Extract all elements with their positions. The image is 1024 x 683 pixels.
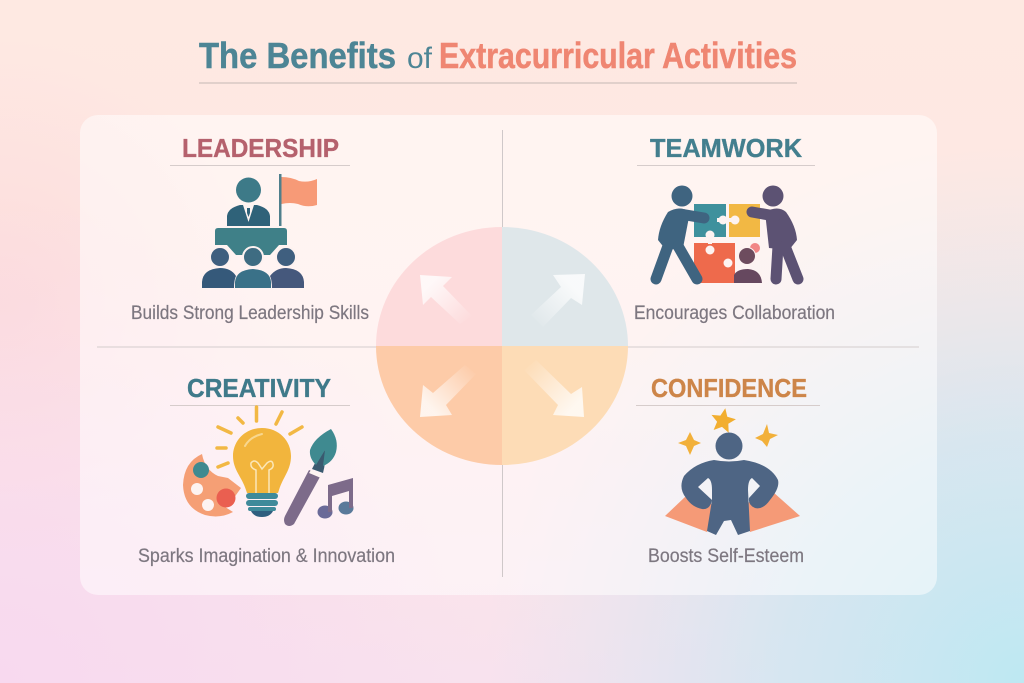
title [199, 35, 797, 76]
panel: confidence [636, 373, 820, 567]
arrow: south-east [524, 360, 584, 417]
heading: confidence: CONFIDENCE [651, 373, 807, 403]
right person [752, 186, 798, 279]
rays [217, 407, 302, 467]
palette [183, 454, 241, 516]
heading: leadership: LEADERSHIP [182, 133, 339, 163]
icon: light bulb, palette, brush and music note [183, 407, 354, 526]
title: Extracurricular Activities [439, 35, 797, 76]
left person [656, 186, 704, 279]
panel: creativity [138, 373, 395, 567]
paintbrush [284, 470, 321, 526]
stars [712, 408, 736, 433]
cape [665, 497, 713, 532]
caption: teamwork: Encourages Collaboration [634, 303, 835, 324]
title: of [407, 42, 433, 75]
arrow: north-east [531, 274, 585, 327]
heading: creativity: CREATIVITY [187, 373, 331, 403]
caption: creativity: Sparks Imagination & Innovation [138, 546, 395, 567]
center circle with arrows [376, 227, 628, 465]
icon: people assembling puzzle [656, 186, 798, 283]
icon: speaker at podium with audience [202, 174, 317, 288]
icon: confident person with cape and stars [665, 408, 800, 535]
arrow: north-west [420, 275, 472, 324]
music note [318, 478, 354, 518]
bulb [233, 428, 291, 493]
caption: confidence: Boosts Self-Esteem [648, 546, 804, 567]
arrow: south-west [420, 365, 476, 417]
heading: teamwork: TEAMWORK [650, 133, 802, 163]
panel: leadership [131, 133, 369, 324]
main panel [80, 115, 937, 595]
title: The Benefits [199, 35, 396, 76]
caption: leadership: Builds Strong Leadership Skills [131, 303, 369, 324]
person [716, 432, 742, 460]
panel: teamwork [634, 133, 835, 324]
